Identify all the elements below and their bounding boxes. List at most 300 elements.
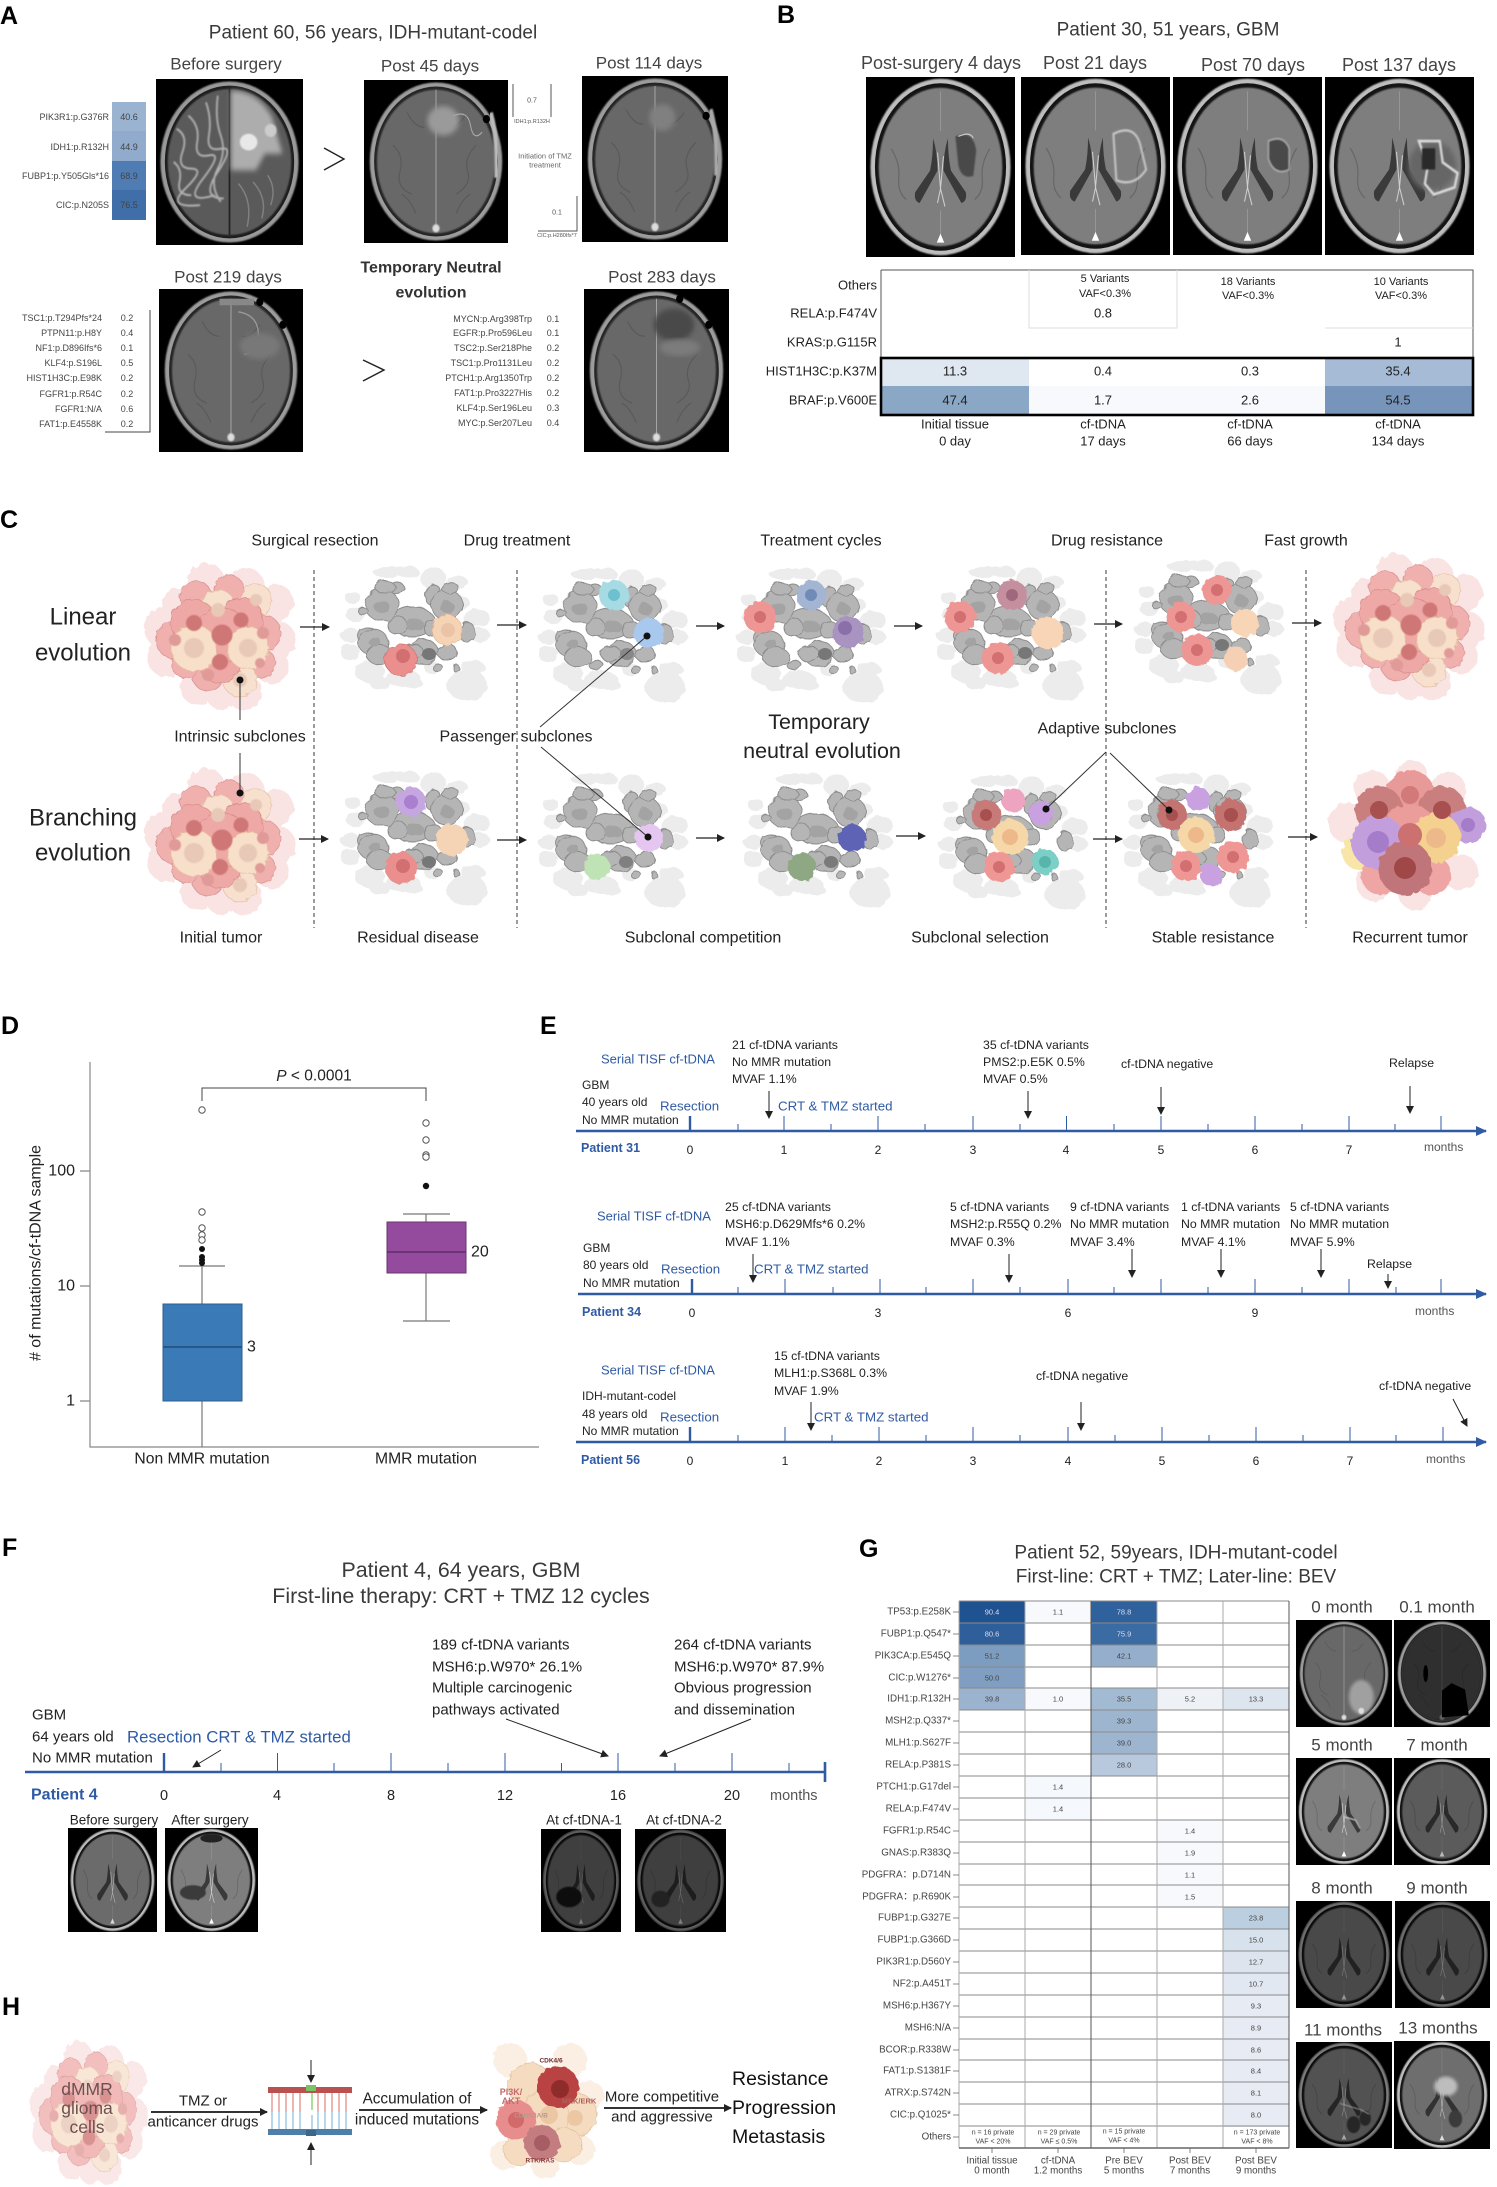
heatmap G: 10.7 bbox=[1249, 1980, 1263, 1988]
timeline patient 56 bbox=[576, 1349, 1486, 1468]
brain MRI post 137 days bbox=[1325, 77, 1474, 255]
row label branching evolution: Branching bbox=[29, 804, 137, 832]
stage headers: Surgical resection bbox=[251, 532, 379, 550]
label post 114 days: Post 114 days bbox=[596, 54, 702, 72]
heatmap table B: cf-tDNA bbox=[1375, 416, 1421, 432]
timeline patient 31: 35 cf-tDNA variants bbox=[983, 1038, 1089, 1052]
small table and TMZ note: 0.7 bbox=[527, 98, 537, 104]
table right: variants at day 283: TSC2:p.Ser218Phe bbox=[454, 343, 532, 353]
stage headers: Drug resistance bbox=[1051, 532, 1163, 550]
timeline F: 16 bbox=[610, 1788, 626, 1804]
heatmap table B: 35.4 bbox=[1385, 364, 1411, 378]
table left: variants at day 219: FGFR1:N/A bbox=[55, 404, 102, 414]
table right: variants at day 283 bbox=[445, 314, 559, 428]
MRI 0 month: 0 month bbox=[1311, 1598, 1373, 1616]
table right: variants at day 283: PTCH1:p.Arg1350Trp bbox=[445, 373, 532, 383]
heatmap table B: 10 Variants bbox=[1374, 276, 1429, 288]
table right: variants at day 283: 0.2 bbox=[547, 343, 559, 353]
heatmap: tissue VAF: PIK3R1:p.G376R bbox=[39, 112, 109, 122]
timeline patient 31: PMS2:p.E5K 0.5% bbox=[983, 1055, 1085, 1069]
timeline patient 34: Relapse bbox=[1367, 1257, 1412, 1271]
timeline F: 20 bbox=[724, 1788, 740, 1804]
timeline patient 34: Patient 34 bbox=[582, 1305, 641, 1319]
label post 45 days: Post 45 days bbox=[381, 56, 479, 76]
row label branching evolution bbox=[29, 804, 137, 866]
timeline patient 31: MVAF 0.5% bbox=[983, 1072, 1048, 1086]
heatmap G: RELA:p.P381S bbox=[885, 1760, 951, 1770]
tumor: initial branching bbox=[144, 768, 296, 915]
heatmap G: 5.2 bbox=[1185, 1694, 1195, 1704]
brain MRI post 219 days bbox=[159, 289, 303, 452]
heatmap table B: 134 days bbox=[1372, 434, 1425, 448]
heatmap G: 1.4 bbox=[1053, 1804, 1063, 1814]
title G bbox=[1014, 1542, 1338, 1588]
heatmap G: 1.9 bbox=[1185, 1848, 1195, 1858]
heatmap G: 0 month bbox=[974, 2166, 1010, 2176]
timeline patient 56: cf-tDNA negative bbox=[1379, 1379, 1471, 1393]
heatmap G: MSH2:p.Q337* bbox=[885, 1716, 951, 1726]
heatmap G: 90.4 bbox=[985, 1608, 999, 1616]
callout passenger subclones: Passenger subclones bbox=[440, 728, 592, 746]
timeline patient 34: MVAF 1.1% bbox=[725, 1235, 790, 1249]
stage labels bottom: Subclonal selection bbox=[911, 930, 1049, 946]
table right: variants at day 283: TSC1:p.Pro1131Leu bbox=[451, 358, 532, 368]
x labels: Non MMR mutation bbox=[134, 1450, 270, 1468]
MRI 5 month bbox=[1296, 1736, 1392, 1865]
stage labels bottom: Stable resistance bbox=[1152, 930, 1274, 946]
timeline patient 31: CRT & TMZ started bbox=[778, 1098, 893, 1114]
timeline patient 34: MVAF 4.1% bbox=[1181, 1235, 1246, 1249]
arrow TMZ: TMZ or bbox=[179, 2092, 227, 2110]
row label linear evolution: Linear bbox=[50, 604, 116, 630]
annotation 189 variants: pathways activated bbox=[432, 1702, 560, 1718]
heading temporary neutral evolution: evolution bbox=[395, 284, 467, 302]
tumor: initial linear bbox=[144, 563, 296, 710]
arrow accumulation: Accumulation of bbox=[363, 2090, 472, 2108]
panel letter E: E bbox=[540, 1012, 557, 1040]
MRI 11 months bbox=[1296, 2020, 1392, 2148]
heatmap table B: 0.8 bbox=[1094, 306, 1112, 320]
table left: variants at day 219: TSC1:p.T294Pfs*24 bbox=[22, 313, 102, 323]
timeline patient 34: GBM bbox=[583, 1241, 610, 1255]
callout adaptive subclones: Adaptive subclones bbox=[1038, 720, 1176, 738]
MRI before surgery F bbox=[68, 1812, 159, 1932]
annotation 264 variants: and dissemination bbox=[674, 1702, 795, 1718]
heatmap G: BCOR:p.R338W bbox=[879, 2044, 952, 2056]
callout passenger subclones bbox=[440, 632, 652, 840]
brain MRI post 70 days bbox=[1173, 77, 1322, 255]
outcomes: Progression bbox=[732, 2097, 836, 2119]
heading temporary neutral evolution C: Temporary bbox=[768, 710, 870, 734]
axes: 10 bbox=[57, 1278, 75, 1294]
timeline F: 4 bbox=[273, 1788, 281, 1804]
patient info F: No MMR mutation bbox=[32, 1750, 153, 1766]
heatmap table B: 5 Variants bbox=[1081, 273, 1130, 285]
MRI 8 month: 8 month bbox=[1311, 1878, 1373, 1898]
table left: variants at day 219: 0.2 bbox=[121, 389, 133, 399]
heatmap G: MLH1:p.S627F bbox=[885, 1738, 951, 1748]
table left: variants at day 219: NF1:p.D896Ifs*6 bbox=[35, 343, 102, 353]
stage labels bottom bbox=[180, 930, 1468, 946]
stage labels bottom: Subclonal competition bbox=[625, 930, 781, 946]
stage headers: Fast growth bbox=[1264, 532, 1348, 550]
table left: variants at day 219: PTPN11:p.H8Y bbox=[41, 328, 102, 338]
heatmap table B: 54.5 bbox=[1385, 392, 1411, 408]
heading temporary neutral evolution C: neutral evolution bbox=[743, 739, 901, 763]
MRI at cf-tDNA-2 bbox=[635, 1812, 726, 1932]
mutated tumor: CDK4/6 bbox=[539, 2058, 563, 2064]
callout adaptive subclones bbox=[1038, 720, 1176, 814]
table right: variants at day 283: KLF4:p.Ser196Leu bbox=[456, 403, 532, 413]
timeline patient 56: 5 bbox=[1159, 1454, 1166, 1468]
table right: variants at day 283: MYCN:p.Arg398Trp bbox=[453, 314, 532, 324]
timeline patient 31: Resection bbox=[660, 1098, 719, 1114]
panel C: evolution models bbox=[0, 506, 1486, 946]
y axis title: # of mutations/cf-tDNA sample bbox=[28, 1145, 44, 1361]
MRI 0.1 month: 0.1 month bbox=[1399, 1598, 1475, 1616]
timeline patient 56: Resection bbox=[660, 1410, 719, 1424]
heatmap G: MSH6:N/A bbox=[905, 2022, 951, 2034]
timeline patient 31: 2 bbox=[875, 1143, 882, 1157]
panel F: patient 4 bbox=[2, 1534, 825, 1932]
heatmap G: VAF < 4% bbox=[1108, 2138, 1140, 2144]
heatmap G: 1.2 months bbox=[1034, 2166, 1082, 2176]
timeline patient 56: 0 bbox=[687, 1454, 694, 1468]
heatmap G: 1.1 bbox=[1053, 1608, 1063, 1616]
dMMR tumor: cells bbox=[69, 2117, 105, 2137]
MRI at cf-tDNA-1: At cf-tDNA-1 bbox=[546, 1812, 622, 1828]
arrow competitive: More competitive bbox=[605, 2088, 719, 2106]
heatmap G: GNAS:p.R383Q bbox=[881, 1848, 951, 1858]
small table and TMZ note: 0.1 bbox=[552, 210, 562, 216]
heatmap G: 23.8 bbox=[1249, 1914, 1263, 1922]
MRI at cf-tDNA-1 bbox=[541, 1812, 622, 1932]
timeline patient 56: 3 bbox=[970, 1454, 977, 1468]
timeline patient 34 bbox=[578, 1200, 1486, 1320]
panel letter G: G bbox=[859, 1535, 878, 1563]
dMMR tumor: glioma bbox=[61, 2098, 113, 2118]
brain MRI post 283 days bbox=[584, 289, 729, 452]
MRI 0 month bbox=[1296, 1598, 1392, 1727]
timeline patient 34: MVAF 5.9% bbox=[1290, 1235, 1355, 1249]
title F: First-line therapy: CRT + TMZ 12 cycles bbox=[272, 1584, 650, 1608]
heatmap table B: cf-tDNA bbox=[1227, 416, 1273, 432]
brain MRI post 21 days bbox=[1021, 77, 1170, 255]
image labels B: Post 70 days bbox=[1201, 55, 1305, 75]
heatmap: tissue VAF: 76.5 bbox=[120, 200, 138, 210]
heatmap G: 39.8 bbox=[985, 1694, 999, 1704]
timeline patient 34: Resection bbox=[661, 1262, 720, 1276]
heatmap G: 75.9 bbox=[1117, 1630, 1131, 1638]
heatmap G: 35.5 bbox=[1117, 1694, 1131, 1704]
heatmap G: 1.4 bbox=[1185, 1826, 1195, 1836]
heatmap table B: cf-tDNA bbox=[1080, 416, 1126, 432]
stage headers: Treatment cycles bbox=[760, 532, 882, 550]
table right: variants at day 283: 0.1 bbox=[547, 314, 559, 324]
heatmap G: PDGFRA：p.R690K bbox=[862, 1892, 951, 1902]
brain MRI post 45 days bbox=[364, 80, 508, 243]
timeline patient 31: Relapse bbox=[1389, 1056, 1434, 1070]
timeline patient 56: Serial TISF cf-tDNA bbox=[601, 1362, 715, 1378]
panel G: patient 52 bbox=[859, 1535, 1490, 2176]
small table and TMZ note bbox=[513, 84, 577, 239]
brain MRI post 114 days bbox=[582, 76, 728, 242]
timeline patient 56: MVAF 1.9% bbox=[774, 1384, 839, 1398]
table left: variants at day 219: 0.2 bbox=[121, 419, 133, 429]
table left: variants at day 219: FAT1:p.E4558K bbox=[39, 419, 102, 429]
arrow TMZ bbox=[148, 2092, 267, 2130]
timeline patient 56: IDH-mutant-codel bbox=[582, 1389, 676, 1403]
patient info F: 64 years old bbox=[32, 1728, 114, 1746]
timeline patient 34: 3 bbox=[875, 1306, 882, 1320]
outcomes: Resistance bbox=[732, 2068, 828, 2090]
brain MRI before surgery bbox=[156, 79, 303, 245]
heatmap G: cf-tDNA bbox=[1041, 2156, 1076, 2166]
label post 283 days: Post 283 days bbox=[608, 268, 716, 286]
MRI at cf-tDNA-2: At cf-tDNA-2 bbox=[646, 1812, 722, 1828]
stage headers: Drug treatment bbox=[464, 532, 571, 550]
timeline patient 56: 2 bbox=[876, 1454, 883, 1468]
timeline patient 31: 21 cf-tDNA variants bbox=[732, 1038, 838, 1052]
heatmap G: 28.0 bbox=[1117, 1760, 1131, 1770]
heatmap G: IDH1:p.R132H bbox=[887, 1694, 951, 1704]
timeline patient 34: No MMR mutation bbox=[583, 1276, 680, 1290]
heading temporary neutral evolution bbox=[360, 260, 502, 302]
heatmap G: 51.2 bbox=[985, 1652, 999, 1660]
heatmap G: PIK3CA:p.E545Q bbox=[875, 1650, 951, 1662]
heatmap G: 50.0 bbox=[985, 1674, 999, 1682]
heatmap G: VAF < 8% bbox=[1241, 2138, 1273, 2146]
timeline patient 56: months bbox=[1426, 1452, 1465, 1466]
timeline patient 34: CRT & TMZ started bbox=[754, 1262, 869, 1276]
mutated tumor: AKT bbox=[502, 2096, 521, 2106]
MRI 13 months: 13 months bbox=[1398, 2018, 1478, 2038]
table right: variants at day 283: FAT1:p.Pro3227His bbox=[454, 388, 532, 398]
table right: variants at day 283: 0.1 bbox=[547, 328, 559, 338]
timeline patient 31: 40 years old bbox=[582, 1095, 647, 1109]
timeline patient 31: MVAF 1.1% bbox=[732, 1072, 797, 1086]
timeline patient 34: MVAF 3.4% bbox=[1070, 1235, 1135, 1249]
heatmap G: 5 months bbox=[1104, 2166, 1144, 2176]
stage labels bottom: Recurrent tumor bbox=[1352, 930, 1468, 946]
timeline F: Patient 4 bbox=[31, 1786, 98, 1804]
heatmap table B: VAF<0.3% bbox=[1222, 290, 1274, 302]
panel letter B: B bbox=[777, 1, 795, 29]
panel letter F: F bbox=[2, 1534, 17, 1562]
clones branching stage 5 bbox=[938, 775, 1088, 910]
heatmap G: 12.7 bbox=[1249, 1958, 1263, 1966]
heatmap: tissue VAF: IDH1:p.R132H bbox=[50, 142, 109, 152]
heatmap table B: 0.4 bbox=[1094, 364, 1112, 378]
image labels B: Post 137 days bbox=[1342, 55, 1456, 75]
timeline patient 31: Patient 31 bbox=[581, 1141, 640, 1155]
heatmap G: 9.3 bbox=[1251, 2002, 1261, 2010]
residual cluster branching bbox=[340, 771, 490, 906]
annotation 264 variants: Obvious progression bbox=[674, 1680, 812, 1696]
image labels B: Post 21 days bbox=[1043, 53, 1147, 73]
heatmap G: 15.0 bbox=[1249, 1936, 1263, 1944]
heatmap G: FGFR1:p.R54C bbox=[883, 1826, 951, 1836]
heatmap table B: VAF<0.3% bbox=[1375, 290, 1427, 302]
heatmap table B: 0.3 bbox=[1241, 364, 1259, 378]
timeline patient 56: 48 years old bbox=[582, 1407, 647, 1421]
table left: variants at day 219: 0.1 bbox=[121, 343, 133, 353]
heatmap G: 8.0 bbox=[1251, 2110, 1261, 2120]
annotation 189 variants: Multiple carcinogenic bbox=[432, 1680, 573, 1696]
title B: Patient 30, 51 years, GBM bbox=[1057, 20, 1279, 40]
heatmap G: 8.9 bbox=[1251, 2024, 1261, 2032]
heatmap G: Post BEV bbox=[1235, 2156, 1277, 2166]
heatmap table B: Initial tissue bbox=[921, 416, 989, 432]
table right: variants at day 283: 0.4 bbox=[547, 418, 559, 428]
title F: Patient 4, 64 years, GBM bbox=[342, 1558, 580, 1582]
heatmap G: 9 months bbox=[1236, 2166, 1276, 2176]
table left: variants at day 219: FGFR1:p.R54C bbox=[39, 389, 102, 399]
stage arrows bottom row bbox=[299, 836, 1317, 840]
panel H: mechanism bbox=[2, 1993, 836, 2184]
timeline patient 31: cf-tDNA negative bbox=[1121, 1057, 1213, 1071]
image labels B: Post-surgery 4 days bbox=[861, 53, 1021, 73]
timeline patient 34: months bbox=[1415, 1304, 1454, 1318]
clones linear stage 5 bbox=[936, 566, 1086, 701]
timeline patient 34: 5 cf-tDNA variants bbox=[950, 1200, 1049, 1214]
timeline patient 31 bbox=[576, 1038, 1486, 1157]
heatmap G: n = 29 private bbox=[1038, 2130, 1080, 2136]
heatmap table B: 11.3 bbox=[943, 364, 967, 378]
row label linear evolution bbox=[35, 604, 131, 666]
arrow greater-than 2 bbox=[363, 360, 384, 381]
arrow TMZ: anticancer drugs bbox=[148, 2114, 258, 2130]
heatmap G: 1.4 bbox=[1053, 1782, 1063, 1792]
timeline patient 56: CRT & TMZ started bbox=[814, 1410, 929, 1424]
mutated tumor: PI3K/ bbox=[500, 2087, 523, 2097]
heatmap table B: 66 days bbox=[1227, 434, 1273, 448]
stage labels bottom: Residual disease bbox=[357, 930, 479, 946]
panel A: patient 60 temporary neutral evolution bbox=[0, 2, 729, 452]
heatmap G: 8.4 bbox=[1251, 2066, 1261, 2076]
heatmap G: 39.0 bbox=[1117, 1738, 1131, 1748]
heatmap table B: 2.6 bbox=[1241, 392, 1259, 408]
title G: Patient 52, 59years, IDH-mutant-codel bbox=[1014, 1542, 1338, 1564]
heatmap G: 8.6 bbox=[1251, 2046, 1261, 2054]
dashed stage dividers bbox=[314, 570, 1306, 928]
annotation 189 variants: 189 cf-tDNA variants bbox=[432, 1636, 570, 1654]
timeline patient 31: Serial TISF cf-tDNA bbox=[601, 1052, 715, 1066]
heatmap G: NF2:p.A451T bbox=[893, 1978, 951, 1990]
timeline patient 34: 9 bbox=[1252, 1306, 1259, 1320]
brain MRI post-surgery 4 days bbox=[866, 77, 1015, 257]
arrow accumulation: induced mutations bbox=[355, 2112, 479, 2128]
heatmap table B: BRAF:p.V600E bbox=[789, 392, 877, 408]
timeline F: 8 bbox=[387, 1788, 395, 1804]
heatmap G: Initial tissue bbox=[966, 2156, 1018, 2166]
MRI 8 month bbox=[1296, 1878, 1392, 2008]
table right: variants at day 283: MYC:p.Ser207Leu bbox=[458, 418, 532, 428]
timeline patient 31: 4 bbox=[1063, 1143, 1070, 1157]
table left: variants at day 219: HIST1H3C:p.E98K bbox=[26, 373, 102, 383]
heatmap table B: 17 days bbox=[1080, 434, 1126, 448]
timeline patient 34: 0 bbox=[689, 1306, 696, 1320]
timeline patient 31: 7 bbox=[1346, 1143, 1353, 1157]
mutated tumor: CDKN2A/B bbox=[514, 2112, 548, 2120]
treatment label F: Resection CRT & TMZ started bbox=[127, 1728, 351, 1746]
table left: variants at day 219: KLF4:p.S196L bbox=[44, 358, 102, 368]
arrow greater-than 1 bbox=[324, 148, 344, 170]
box MMR bbox=[387, 1120, 489, 1321]
DNA mismatch icon bbox=[268, 2060, 352, 2165]
heatmap G: FUBP1:p.Q547* bbox=[881, 1628, 951, 1640]
timeline patient 56: MLH1:p.S368L 0.3% bbox=[774, 1366, 887, 1380]
table right: variants at day 283: 0.3 bbox=[547, 403, 559, 413]
timeline patient 31: No MMR mutation bbox=[732, 1055, 831, 1069]
heatmap G: 78.8 bbox=[1117, 1608, 1131, 1616]
MRI 7 month bbox=[1394, 1736, 1490, 1865]
timeline patient 34: 1 cf-tDNA variants bbox=[1181, 1200, 1280, 1214]
heatmap G: 1.1 bbox=[1185, 1870, 1195, 1880]
MRI 9 month bbox=[1395, 1878, 1490, 2008]
heatmap G: FUBP1:p.G366D bbox=[877, 1934, 951, 1946]
heatmap table B: 1.7 bbox=[1094, 392, 1112, 408]
heatmap G: FUBP1:p.G327E bbox=[878, 1912, 951, 1924]
heatmap table B: KRAS:p.G115R bbox=[787, 334, 877, 350]
heatmap G: n = 173 private bbox=[1234, 2130, 1280, 2136]
dMMR tumor: dMMR bbox=[61, 2079, 113, 2099]
annotation 264 variants bbox=[674, 1636, 824, 1718]
heading temporary neutral evolution: Temporary Neutral bbox=[360, 260, 502, 276]
heatmap G: 8.1 bbox=[1251, 2088, 1261, 2098]
timeline patient 34: MSH6:p.D629Mfs*6 0.2% bbox=[725, 1217, 865, 1231]
heatmap G: 42.1 bbox=[1117, 1652, 1131, 1660]
timeline patient 34: 5 cf-tDNA variants bbox=[1290, 1200, 1389, 1214]
panel letter D: D bbox=[1, 1012, 19, 1040]
significance bracket bbox=[202, 1068, 426, 1101]
outcomes bbox=[732, 2068, 836, 2148]
table left: variants at day 219: 0.2 bbox=[121, 313, 133, 323]
timeline patient 56: No MMR mutation bbox=[582, 1424, 679, 1438]
x labels bbox=[134, 1450, 477, 1468]
clones branching stage 3 bbox=[538, 773, 688, 908]
heatmap table B: 1 bbox=[1394, 334, 1402, 350]
heatmap table B: RELA:p.F474V bbox=[790, 306, 877, 320]
heatmap: tissue VAF bbox=[22, 102, 146, 220]
timeline F: months bbox=[770, 1788, 818, 1804]
heatmap table B: 18 Variants bbox=[1221, 276, 1276, 288]
timeline patient 56: 6 bbox=[1253, 1454, 1260, 1468]
MRI 5 month: 5 month bbox=[1311, 1736, 1373, 1754]
panel letter C: C bbox=[0, 506, 18, 534]
patient info F: GBM bbox=[32, 1706, 66, 1724]
timeline patient 34: 80 years old bbox=[583, 1258, 648, 1272]
timeline patient 31: 5 bbox=[1158, 1143, 1165, 1157]
box MMR: 20 bbox=[471, 1244, 489, 1260]
arrow competitive bbox=[604, 2088, 731, 2126]
annotation 189 variants bbox=[432, 1636, 582, 1718]
row label branching evolution: evolution bbox=[35, 840, 131, 866]
timeline patient 56: 15 cf-tDNA variants bbox=[774, 1349, 880, 1363]
timeline patient 31: GBM bbox=[582, 1078, 609, 1092]
arrows F bbox=[193, 1719, 751, 1767]
heatmap G: FAT1:p.S1381F bbox=[883, 2066, 951, 2076]
heatmap G: RELA:p.F474V bbox=[886, 1804, 951, 1814]
stage arrows top row bbox=[300, 623, 1321, 627]
annotation 264 variants: 264 cf-tDNA variants bbox=[674, 1636, 812, 1654]
row label linear evolution: evolution bbox=[35, 640, 131, 666]
timeline patient 34: No MMR mutation bbox=[1290, 1217, 1389, 1231]
heatmap G: TP53:p.E258K bbox=[887, 1606, 951, 1618]
image labels B bbox=[861, 53, 1456, 75]
table left: variants at day 219: 0.5 bbox=[121, 358, 133, 368]
heatmap G: Pre BEV bbox=[1105, 2156, 1143, 2166]
